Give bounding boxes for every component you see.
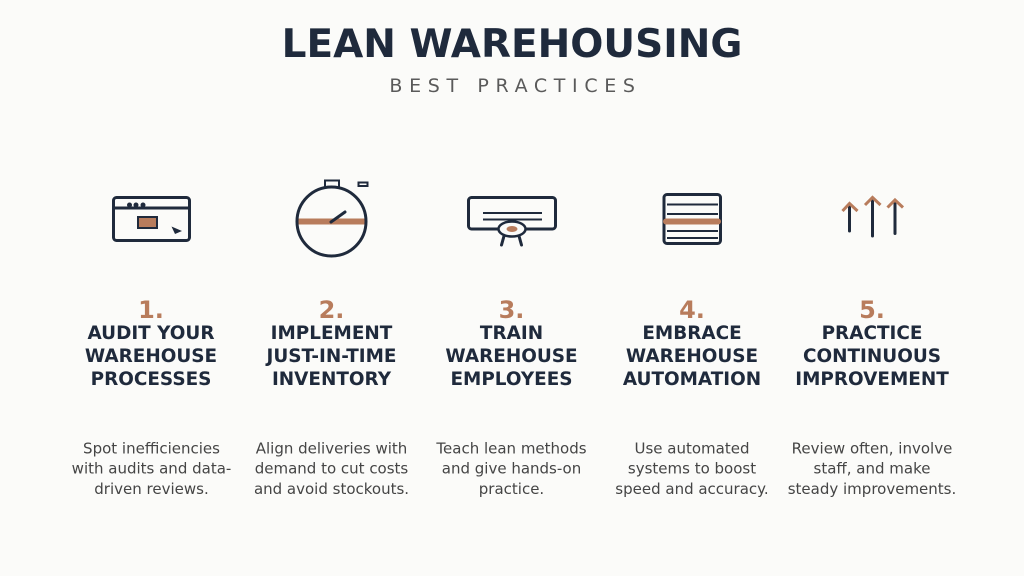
step 2 description: and avoid stockouts. (254, 480, 409, 498)
step 5 description: steady improvements. (788, 480, 956, 498)
step 1 description: Spot inefficiencies (83, 440, 220, 458)
icon: three upward arrows (842, 198, 903, 236)
step 1 heading: PROCESSES (91, 369, 211, 390)
step 5 description: Review often, involve (792, 440, 952, 458)
step 3 description: Teach lean methods (435, 440, 587, 458)
step 4 description: Use automated (635, 440, 749, 458)
step 4 description: speed and accuracy. (615, 480, 769, 498)
step 4 heading: WAREHOUSE (626, 346, 758, 367)
title: LEAN WAREHOUSING (282, 22, 742, 67)
step 1 heading: WAREHOUSE (85, 346, 217, 367)
step 4 heading: EMBRACE (642, 323, 742, 344)
step 5 description: staff, and make (814, 460, 930, 478)
icon: air conditioning unit (468, 198, 556, 245)
step 5 number: 5. (859, 296, 885, 324)
step 5 heading: PRACTICE (822, 323, 922, 344)
step 1 (72, 296, 231, 498)
icon: browser window (114, 198, 190, 240)
step 4 (615, 296, 769, 498)
step 3 heading: WAREHOUSE (445, 346, 578, 367)
step 1 heading: AUDIT YOUR (87, 323, 215, 344)
step 4 number: 4. (679, 296, 705, 324)
step 5 heading: IMPROVEMENT (795, 369, 949, 390)
step 2 heading: IMPLEMENT (271, 323, 393, 344)
step 3 description: practice. (479, 480, 544, 498)
step 2 heading: INVENTORY (272, 369, 392, 390)
step 2 number: 2. (319, 296, 344, 324)
step 1 number: 1. (138, 296, 164, 324)
step 3 heading: TRAIN (480, 323, 543, 344)
step 2 heading: JUST-IN-TIME (265, 346, 396, 367)
step 2 (254, 296, 409, 498)
step 4 description: systems to boost (628, 460, 756, 478)
step 3 heading: EMPLOYEES (450, 369, 573, 390)
step 5 heading: CONTINUOUS (803, 346, 941, 367)
icon: stopwatch (297, 180, 368, 256)
step 2 description: demand to cut costs (255, 460, 408, 478)
step 4 heading: AUTOMATION (623, 369, 761, 390)
icon: roller shutter (664, 194, 720, 244)
subtitle: BEST PRACTICES (389, 75, 642, 97)
step 5 (788, 296, 956, 498)
step 1 description: with audits and data- (72, 460, 231, 478)
step 3 description: and give hands-on (442, 460, 581, 478)
step 2 description: Align deliveries with (256, 440, 407, 458)
step 3 (435, 296, 587, 498)
step 1 description: driven reviews. (94, 480, 209, 498)
step 3 number: 3. (499, 296, 524, 324)
